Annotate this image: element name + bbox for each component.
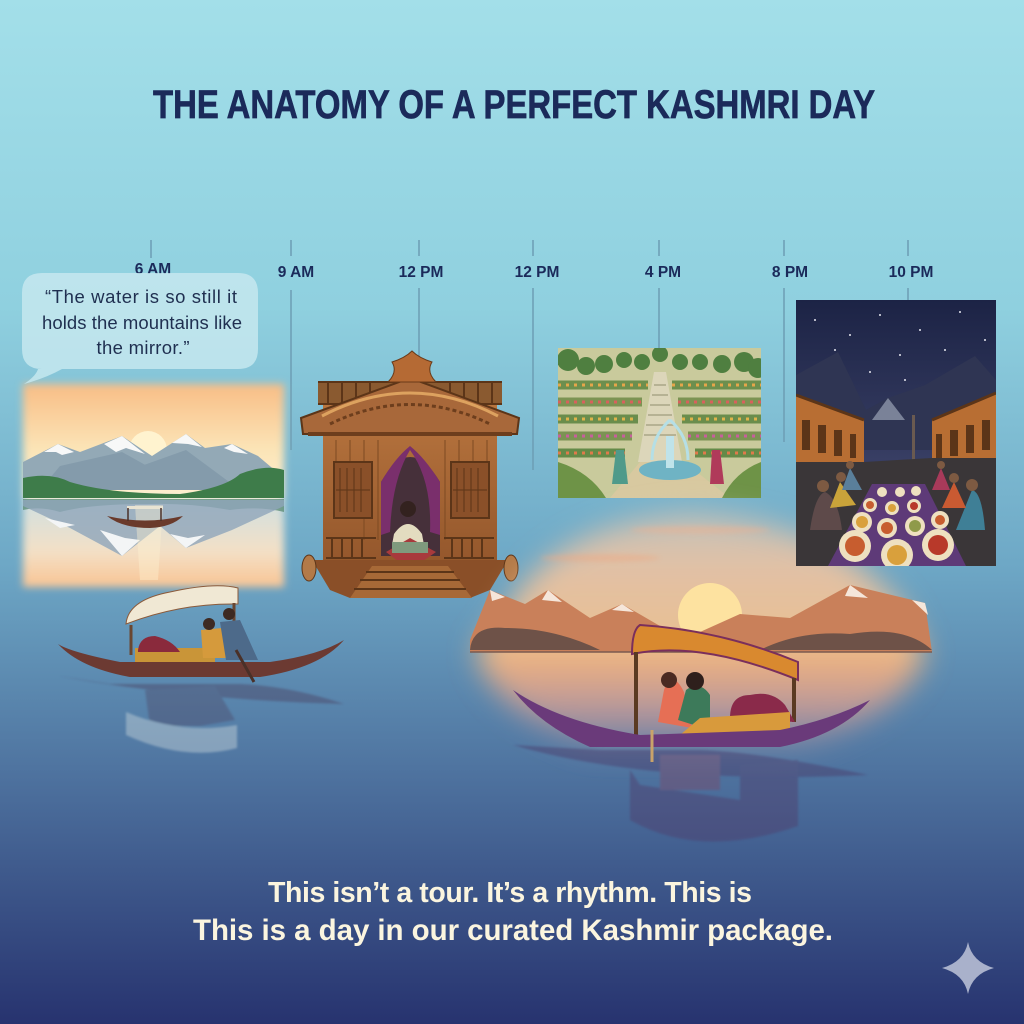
time label: 6 AM: 6 AM: [135, 261, 171, 278]
time label: 12 PM: 12 PM: [399, 264, 443, 281]
title: THE ANATOMY OF A PERFECT KASHMRI DAY: [153, 83, 875, 127]
illustration: terraced garden: [557, 346, 768, 498]
illustration: night feast: [796, 300, 996, 571]
time label: 8 PM: 8 PM: [772, 264, 808, 281]
quote bubble: [22, 273, 258, 384]
time label: 12 PM second: 12 PM: [515, 264, 559, 281]
timeline: [135, 240, 933, 470]
closing statement: [193, 877, 833, 947]
illustration: houseboat: [301, 351, 519, 598]
closing statement: This is a day in our curated Kashmir package.: [193, 914, 833, 947]
illustration: dawn lake: [23, 384, 284, 587]
quote bubble: “The water is so still it: [45, 286, 237, 307]
time label: 9 AM: 9 AM: [278, 264, 314, 281]
quote bubble: the mirror.”: [96, 337, 190, 358]
illustration: sunset lake with shikara: [470, 512, 932, 842]
icon: sparkle: [942, 942, 994, 994]
closing statement: This isn’t a tour. It’s a rhythm. This is: [268, 877, 752, 909]
time label: 10 PM: 10 PM: [889, 264, 933, 281]
time label: 4 PM: 4 PM: [645, 264, 681, 281]
small boat: [107, 516, 183, 528]
illustration: small shikara: [58, 586, 344, 753]
quote bubble: holds the mountains like: [42, 312, 242, 333]
